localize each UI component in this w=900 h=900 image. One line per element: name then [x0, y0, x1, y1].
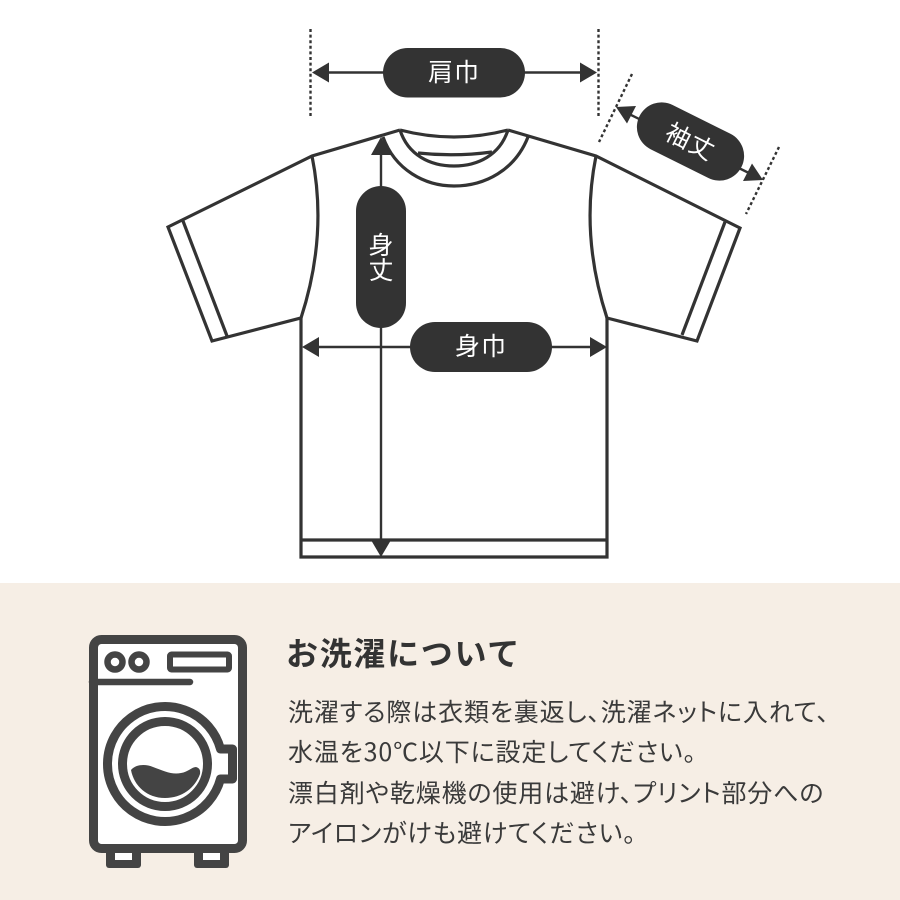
body length measurement	[356, 137, 406, 557]
body width measurement	[302, 322, 607, 372]
body length measurement: 丈	[368, 251, 394, 287]
text block: washing instructions: アイロンがけも避けてください。	[288, 814, 636, 850]
panel: washing instructions background	[0, 583, 900, 900]
text block: washing instructions	[288, 693, 830, 850]
shoulder width measurement: 肩巾	[428, 53, 480, 89]
text block: washing instructions: 洗濯する際は衣類を裏返し、洗濯ネットに入れて、	[288, 693, 830, 729]
sleeve length measurement	[599, 74, 779, 214]
sleeve length measurement: 袖丈	[660, 113, 722, 168]
text block: washing instructions: 漂白剤や乾燥機の使用は避け、プリント部分への	[288, 774, 824, 810]
heading: about washing: お洗濯について	[286, 629, 521, 675]
shoulder width measurement	[310, 29, 598, 116]
body width measurement: 身巾	[455, 327, 507, 363]
text block: washing instructions: 水温を30℃以下に設定してください。	[288, 733, 697, 769]
body length measurement: 身	[368, 226, 394, 262]
t-shirt outline	[168, 130, 740, 557]
icon: washing machine	[92, 640, 242, 868]
